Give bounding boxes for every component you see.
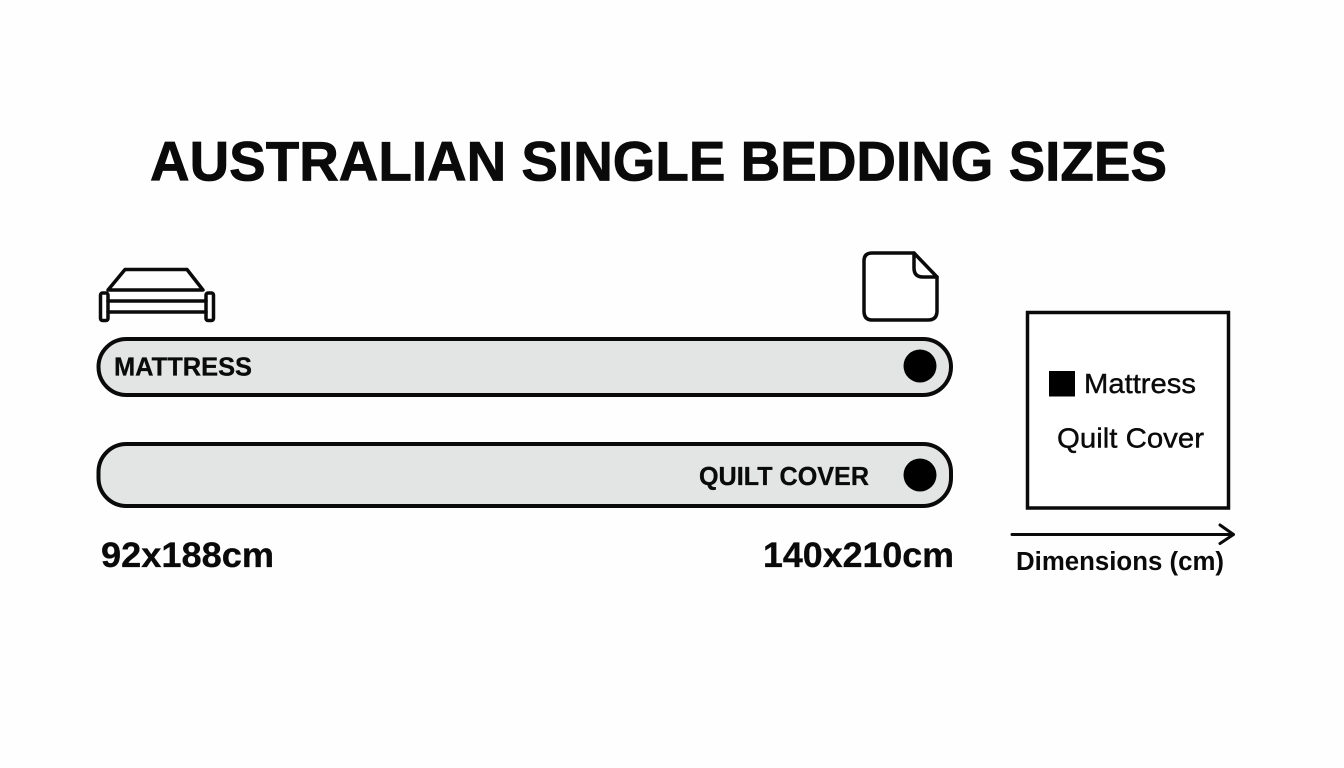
- legend: [1028, 312, 1228, 508]
- bar: quilt cover: [98, 444, 951, 506]
- arrow: dimensions axis: [1012, 525, 1234, 544]
- marker: mattress end point: [904, 350, 936, 382]
- legend swatch: mattress: [1049, 371, 1075, 396]
- label: mattress bar: MATTRESS: [114, 352, 252, 382]
- legend label: mattress: Mattress: [1084, 368, 1196, 399]
- dimension: mattress size: 92x188cm: [101, 536, 274, 575]
- marker: quilt cover end point: [904, 458, 936, 492]
- bar: mattress: [98, 339, 951, 395]
- legend label: quilt cover: Quilt Cover: [1057, 422, 1204, 454]
- label: quilt cover bar: QUILT COVER: [699, 461, 869, 491]
- icon: quilt cover sheet: [864, 253, 937, 320]
- icon: bed: [100, 270, 214, 320]
- dimension: quilt cover size: 140x210cm: [763, 536, 954, 575]
- axis label: Dimensions (cm): [1016, 548, 1224, 576]
- title: AUSTRALIAN SINGLE BEDDING SIZES: [150, 130, 1167, 192]
